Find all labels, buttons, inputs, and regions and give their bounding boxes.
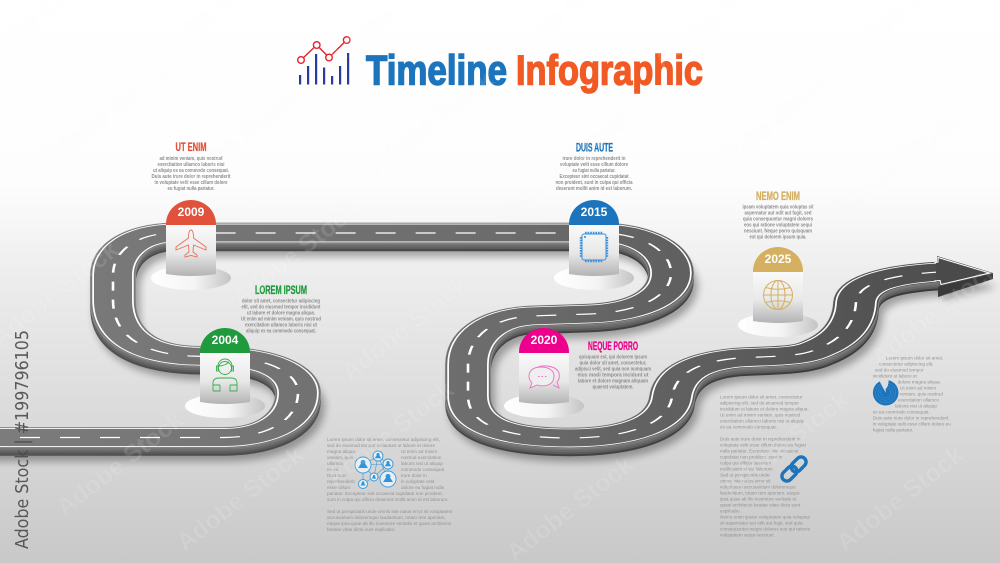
text block: lower right column: Ut enim ad minim veniam, quis nostrud [720, 412, 801, 418]
text block: lower right column: cupidatat non proident, sunt in [720, 454, 783, 460]
watermark: Adobe Stock [336, 271, 474, 387]
text block: far right: Duis aute irure dolor in reprehenderit [873, 416, 949, 420]
callout: UT ENIM: ad minim veniam, quis nostrud [160, 156, 223, 162]
text block: lower right column: voluptatem sequi nesciunt. [720, 532, 775, 538]
watermark: Adobe Stock [361, 66, 499, 182]
icon: airplane [176, 230, 206, 257]
watermark: Adobe Stock [826, 108, 964, 224]
text block: lower right column: Lorem ipsum dolor sit amet, consectetur [720, 394, 803, 400]
text block: lower centre [327, 437, 452, 532]
base disc [151, 266, 231, 290]
callout: LOREM IPSUM: elit, sed do eiusmod tempor incididunt [242, 304, 321, 310]
watermark: Adobe Stock [36, 58, 174, 174]
callout: LOREM IPSUM: exercitation ullamco laboris nisi ut [245, 322, 317, 328]
icon: chain link [780, 455, 808, 483]
text block: lower right column: voluptatem accusantium doloremque [720, 484, 796, 490]
callout: DUIS AUTE: deserunt mollit anim id est laborum. [556, 186, 632, 192]
callout: UT ENIM: eu fugiat nulla pariatur. [168, 186, 215, 192]
dome [569, 200, 619, 225]
text block: far right: veniam, quis nostrud [900, 392, 943, 396]
text block: lower right column: exercitation ullamco laboris nisi ut aliquip [720, 418, 805, 424]
pillar [166, 225, 216, 276]
callout: NEQUE PORRO: labore et dolore magnam aliquam [578, 379, 648, 385]
text block: lower centre: magna aliqua. [327, 449, 356, 454]
callout: DUIS AUTE: DUIS AUTE [576, 142, 613, 154]
text block: lower right column: omnis iste natus error sit [720, 478, 771, 484]
stock id vertical label: Adobe Stock | #199796105 [12, 330, 33, 549]
text block: lower centre: ullamco [327, 461, 343, 466]
text block: lower centre: commodo consequat. [401, 467, 445, 472]
text block: lower centre: in voluptate velit [401, 479, 435, 484]
text block: lower centre: veniam, quis [327, 455, 354, 460]
marker: 2009 [151, 200, 231, 290]
text block: far right: fugiat nulla pariatur. [873, 428, 913, 432]
dome [519, 328, 569, 353]
callout: NEMO ENIM: aspernatur aut odit aut fugit, sed [744, 211, 812, 217]
text block: lower centre: irure dolor in [401, 473, 427, 478]
callout: UT ENIM: in voluptate velit esse cillum dolore [154, 180, 228, 186]
text block: lower centre: dolore eu fugiat nulla [401, 485, 445, 490]
text block: lower right column: nulla pariatur. Excepteur sint occaecat [720, 448, 799, 454]
watermark: Adobe Stock [51, 406, 189, 522]
text block: lower centre: laboris nisi ut aliquip [401, 461, 443, 466]
callout: NEQUE PORRO: eius modi tempora incidunt ut [578, 373, 649, 379]
winding road with arrow [0, 233, 997, 451]
text block: far right: incididunt ut labore et [873, 374, 918, 378]
icon: people network [355, 451, 396, 488]
text block: far right: sed do eiusmod tempor [875, 368, 924, 372]
callout: NEMO ENIM: est qui dolorem ipsum quia. [750, 235, 807, 241]
watermark: Adobe Stock [226, 196, 364, 312]
base disc [738, 313, 818, 337]
text block: lower right column: explicabo. [720, 508, 741, 514]
callout: DUIS AUTE [556, 142, 633, 192]
year: 2025 [765, 252, 792, 266]
callout: NEQUE PORRO: adipisci velit, sed quia non numquam [575, 367, 651, 373]
text block: far right: in voluptate velit esse cillum dolore eu [873, 422, 951, 426]
callout: UT ENIM: ut aliquip ex ea commodo consequat. [153, 168, 229, 174]
text block: lower centre: nostrud exercitation [401, 455, 442, 460]
base disc [185, 394, 265, 418]
base disc [554, 266, 634, 290]
title [366, 46, 703, 94]
callout: NEMO ENIM: nesciunt. Neque porro quisquam [744, 229, 812, 235]
text block: lower centre: ex ea [327, 467, 339, 472]
pillar [753, 272, 803, 323]
callout: UT ENIM [152, 142, 231, 192]
title logo: chart icon [298, 37, 350, 84]
text block: lower centre: accusantium doloremque laudantium, totam rem aperiam, [327, 515, 446, 520]
text block: far right [873, 356, 951, 432]
callout: LOREM IPSUM [241, 285, 321, 334]
year: 2020 [531, 333, 558, 347]
watermark: Adobe Stock [321, 376, 459, 492]
text block: lower centre: Duis aute [327, 473, 347, 478]
text block: lower right column: sit aspernatur aut odit aut fugit, sed quia [720, 520, 803, 526]
callout: NEMO ENIM: eos qui ratione voluptatem sequi [744, 223, 812, 229]
callout: NEQUE PORRO: quisquam est, qui dolorem ipsum [579, 355, 647, 361]
text block: lower right column: quasi architecto beatae vitae dicta sunt [720, 502, 801, 508]
icon: globe [764, 280, 792, 310]
title: Timeline [366, 46, 507, 94]
callout: NEMO ENIM [742, 191, 814, 241]
marker: 2025 [738, 247, 818, 337]
callout: DUIS AUTE: Excepteur sint occaecat cupidatat [560, 174, 629, 180]
pillar [519, 353, 569, 404]
text block: far right: exercitation ullamco [898, 398, 939, 402]
text block: lower right column: ex ea commodo consequat. [720, 424, 777, 430]
watermark: Adobe Stock [171, 441, 309, 557]
marker: 2004 [185, 328, 265, 418]
callout: NEMO ENIM: quia consequuntur magni dolores [743, 217, 813, 223]
pillar [569, 225, 619, 276]
title: Infographic [516, 46, 703, 94]
callout: UT ENIM: Duis aute irure dolor in reprehenderit [152, 174, 231, 180]
callout: LOREM IPSUM: Ut enim ad minim veniam, quis nostrud [241, 316, 321, 322]
year: 2004 [212, 333, 239, 347]
text block: far right: Lorem ipsum dolor sit amet, [886, 356, 943, 360]
callout: NEMO ENIM: ipsam voluptatem quia voluptas sit [742, 205, 814, 211]
watermark: Adobe Stock [166, 84, 304, 200]
text block: lower right column: culpa qui officia deserunt [720, 460, 772, 466]
text block: lower centre: pariatur. Excepteur sint occaecat cupidatat non proident, [327, 491, 443, 496]
marker: 2020 [504, 328, 584, 418]
watermark: Adobe Stock [716, 386, 854, 502]
text block: lower right column [720, 394, 811, 538]
text block: far right: dolore magna aliqua. [898, 380, 941, 384]
callout: DUIS AUTE: eu fugiat nulla pariatur. [572, 168, 616, 174]
callout: LOREM IPSUM: aliquip ex ea commodo consequat. [246, 328, 316, 334]
watermark: Adobe Stock [831, 441, 969, 557]
text block: lower centre: esse cillum [327, 485, 350, 490]
callout: UT ENIM: exercitation ullamco laboris nisi [158, 162, 225, 168]
watermark: Adobe Stock [496, 106, 634, 222]
callout: LOREM IPSUM: LOREM IPSUM [255, 285, 307, 297]
marker: 2015 [554, 200, 634, 290]
callout: NEQUE PORRO: quia dolor sit amet, consectetur, [580, 361, 647, 367]
callout: UT ENIM: UT ENIM [176, 142, 206, 154]
text block: lower centre: sunt in culpa qui officia deserunt mollit anim id est laborum. [327, 497, 448, 502]
text block: far right: laboris nisi ut aliquip [895, 404, 937, 408]
year: 2015 [581, 205, 608, 219]
callout: DUIS AUTE: voluptate velit esse cillum dolore [560, 162, 628, 168]
callout: NEQUE PORRO: quaerat voluptatem. [592, 385, 634, 391]
icon: headset support person [213, 359, 237, 391]
icon: radial pie [873, 379, 898, 406]
text block: lower right column: voluptate velit esse cillum dolore eu fugiat [720, 442, 807, 448]
base disc [504, 394, 584, 418]
text block: far right: ex ea commodo consequat. [873, 410, 930, 414]
text block: lower right column: Duis aute irure dolor in reprehenderit in [720, 436, 801, 442]
text block: lower right column: Nemo enim ipsam voluptatem quia voluptas [720, 514, 811, 520]
icon: speech bubbles [529, 366, 559, 388]
text block: lower centre: Lorem ipsum dolor sit amet, consectetur adipiscing elit, [327, 437, 440, 442]
text block: lower right column: consequuntur magni dolores eos qui ratione [720, 526, 811, 532]
text block: lower centre: Sed ut perspiciatis unde omnis iste natus error sit voluptatem [327, 509, 452, 514]
callout: DUIS AUTE: irure dolor in reprehenderit in [562, 156, 626, 162]
dome [166, 200, 216, 225]
text block: lower right column: Sed ut perspiciatis unde [720, 472, 770, 478]
text block: lower right column: ipsa quae ab illo inventore veritatis et [720, 496, 797, 502]
text block: lower centre: beatae vitae dicta sunt explicabo. [327, 527, 396, 532]
text block: lower right column: mollit anim id est laborum. [720, 466, 774, 472]
text block: lower centre: reprehenderit [327, 479, 355, 484]
text block: lower right column: adipiscing elit, sed do eiusmod tempor [720, 400, 799, 406]
callout: LOREM IPSUM: ut labore et dolore magna aliqua. [247, 310, 315, 316]
dome [753, 247, 803, 272]
callout: NEMO ENIM: NEMO ENIM [756, 191, 800, 203]
text block: lower centre: Ut enim ad minim [401, 449, 437, 454]
text block: far right: consectetur adipiscing elit, [879, 362, 933, 366]
text block: lower centre: eaque ipsa quae ab illo inventore veritatis et quasi architecto [327, 521, 452, 526]
callout: DUIS AUTE: non proident, sunt in culpa qui officia [556, 180, 633, 186]
icon: microchip [581, 233, 607, 261]
watermark: Adobe Stock [866, 256, 1000, 372]
text block: lower right column: incididunt ut labore et dolore magna aliqua. [720, 406, 809, 412]
callout: LOREM IPSUM: dolor sit amet, consectetur adipiscing [242, 298, 320, 304]
dome [200, 328, 250, 353]
year: 2009 [178, 205, 205, 219]
text block: lower centre: sed do eiusmod tempor incididunt ut labore et dolore [327, 443, 436, 448]
watermark: Adobe Stock [698, 68, 836, 184]
pillar [200, 353, 250, 404]
text block: lower right column: laudantium, totam rem aperiam, eaque [720, 490, 800, 496]
callout: NEQUE PORRO: NEQUE PORRO [588, 341, 638, 353]
callout: NEQUE PORRO [575, 341, 651, 391]
text block: far right: Ut enim ad minim [900, 386, 936, 390]
